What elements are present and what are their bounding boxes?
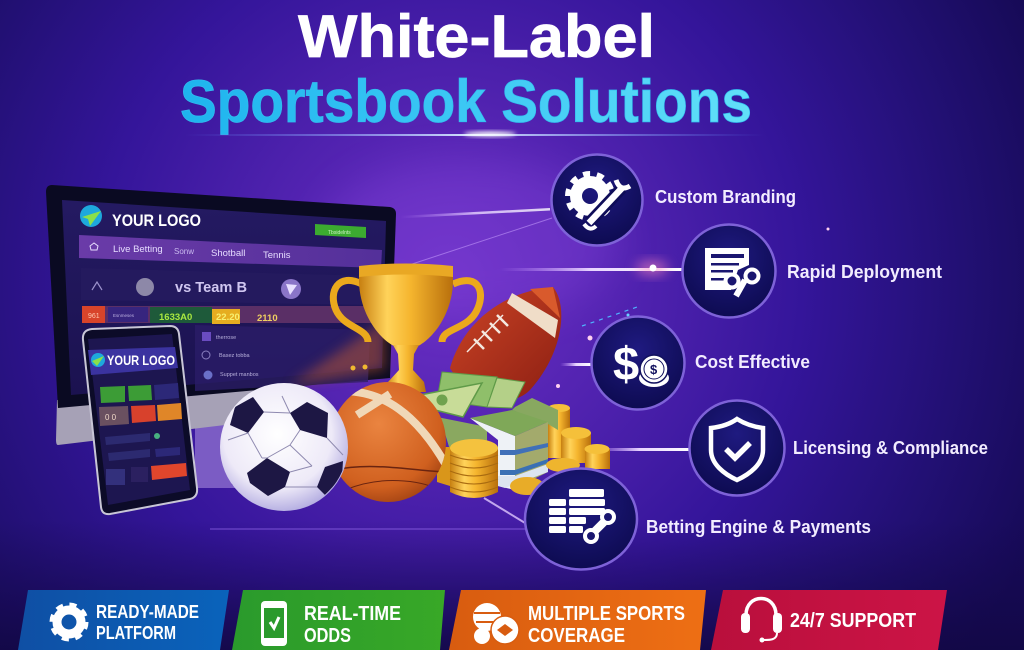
football stripe (507, 293, 558, 338)
icon: dollar and coins: $ (650, 362, 658, 377)
phone bottom buttons (106, 463, 187, 485)
trophy rim (359, 264, 453, 277)
phone sliders (105, 433, 180, 461)
phone buttons row two (99, 403, 182, 426)
label: COVERAGE (528, 625, 625, 647)
icon: dollar and coins: $ (613, 337, 639, 390)
label: Custom Branding (655, 186, 796, 207)
odds row: Esnmeses (113, 313, 135, 318)
phone buttons row two: 0 0 (105, 413, 117, 422)
icon: phone check (261, 601, 287, 646)
navigation bar (79, 235, 382, 268)
icon: dollar and coins (613, 337, 669, 390)
red panel (711, 590, 947, 650)
feature: licensing and compliance (690, 400, 988, 496)
coins behind money (548, 404, 570, 458)
label: REAL-TIME (304, 603, 401, 625)
monitor bezel (46, 185, 396, 408)
trophy stem (386, 345, 426, 392)
icon: sports balls (473, 603, 519, 644)
icon: shield check (711, 419, 763, 480)
navigation bar: Sonw (174, 247, 194, 256)
rear money stack (512, 398, 558, 430)
odds row: 2110 (257, 313, 278, 324)
feature: rapid deployment (682, 224, 942, 318)
football body (450, 287, 561, 401)
circle (552, 154, 642, 246)
phone screen (88, 334, 190, 505)
list rows (195, 320, 385, 391)
sparkle stars (556, 228, 830, 388)
phone body (83, 326, 197, 514)
odds row: 1633A0 (159, 312, 192, 323)
title underline glow (185, 132, 765, 136)
orange panel (449, 590, 706, 650)
screen logo (80, 205, 201, 230)
football tip highlight (530, 287, 560, 318)
front money stack (470, 410, 548, 490)
circle (592, 316, 684, 410)
list rows: Basez tobba (219, 353, 251, 359)
screen action button: Tbsidelnts (328, 230, 351, 236)
soccer ball (220, 383, 348, 511)
label: ODDS (304, 625, 351, 647)
icon: table and link (549, 489, 614, 542)
phone header: YOUR LOGO (107, 352, 175, 368)
trophy cup (359, 268, 453, 347)
label: Cost Effective (695, 351, 810, 372)
desktop monitor (46, 185, 396, 488)
circle (682, 224, 776, 318)
ball markings (344, 388, 444, 488)
label: PLATFORM (96, 623, 176, 643)
icon: gear (52, 605, 86, 639)
banner: multiple sports coverage (449, 590, 706, 650)
label: Licensing & Compliance (793, 437, 988, 458)
odds row (82, 306, 372, 324)
screen logo: YOUR LOGO (112, 211, 201, 230)
match row: vs Team B (175, 279, 247, 296)
ball body (330, 382, 446, 502)
icon: document and links (705, 248, 758, 296)
navigation bar: Tennis (263, 250, 291, 261)
label: 24/7 SUPPORT (790, 610, 916, 632)
basketball (330, 382, 446, 502)
label: Betting Engine & Payments (646, 516, 871, 537)
large coin stack (437, 439, 498, 498)
trophy handles (333, 280, 481, 342)
title (180, 3, 765, 136)
right coin stacks (510, 427, 610, 495)
light streaks to feature circles (210, 208, 830, 530)
monitor chin (56, 385, 260, 445)
phone (83, 326, 197, 514)
icon: headset (741, 598, 782, 642)
money and coins (420, 372, 610, 498)
list rows: Suppet manbos (220, 372, 259, 378)
phone header (88, 347, 178, 375)
feature: custom branding (552, 154, 796, 246)
navigation bar: Live Betting (113, 244, 163, 255)
icon: gear and wrench (568, 174, 630, 229)
monitor screen (62, 200, 386, 395)
list rows: therrose (216, 335, 236, 341)
label: Rapid Deployment (787, 261, 942, 282)
odds row: 22.20 (216, 312, 240, 323)
banner: ready-made platform (18, 590, 229, 650)
blue panel (18, 590, 229, 650)
left money stack (437, 417, 487, 450)
trophy (333, 264, 481, 392)
label: READY-MADE (96, 602, 199, 622)
circle (690, 400, 784, 496)
title line 1: White-Label (298, 3, 655, 70)
circle (525, 468, 637, 570)
football laces (467, 315, 508, 352)
banner: real-time odds (232, 590, 445, 650)
monitor stand (195, 425, 250, 488)
title line 2: Sportsbook Solutions (180, 68, 752, 135)
loose bills (420, 372, 525, 417)
label: MULTIPLE SPORTS (528, 603, 685, 625)
navigation bar: Shotball (211, 248, 245, 259)
feature: betting engine and payments (525, 468, 871, 570)
odds row: 961 (88, 313, 100, 320)
american football (450, 287, 561, 401)
phone buttons row one (100, 383, 179, 403)
screen action button (315, 224, 366, 238)
banner: 24/7 support (711, 590, 947, 650)
soccer panels (228, 396, 343, 496)
feature: cost effective (592, 316, 810, 410)
match row (81, 268, 375, 305)
green panel (232, 590, 445, 650)
